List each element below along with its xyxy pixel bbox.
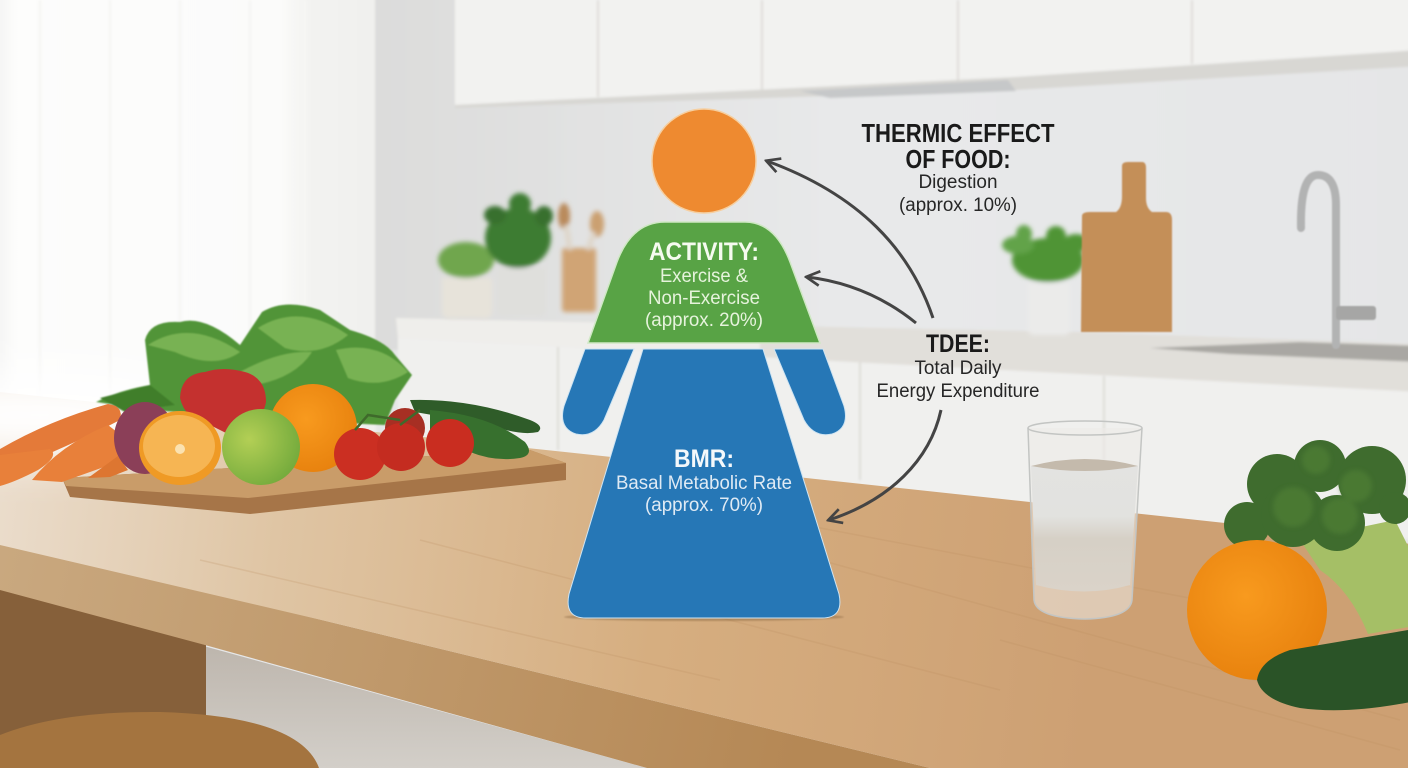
green apple: [222, 409, 300, 485]
lower cabinets: [398, 336, 1408, 540]
TDEE label: Energy Expenditure: [876, 381, 1040, 402]
vegetables on cutting board: [0, 304, 566, 514]
lower body: BMR segment: [562, 349, 846, 618]
cutting board on counter: [1081, 162, 1172, 332]
right potted plant: [1002, 225, 1089, 335]
wall below table: [0, 590, 647, 768]
faucet: [1301, 175, 1376, 345]
activity detail: [645, 266, 763, 331]
cucumber: [1257, 628, 1408, 710]
TDEE label: [876, 330, 1040, 402]
table leg: [0, 585, 206, 740]
red onion: [114, 402, 176, 474]
BMR detail: Basal Metabolic Rate: [616, 473, 792, 494]
stool: [0, 712, 319, 768]
activity label: ACTIVITY:: [649, 238, 759, 266]
broccoli, orange and cucumber: [1187, 440, 1408, 710]
head: thermic effect segment: [652, 109, 756, 213]
table surface: [0, 392, 1408, 768]
torso: activity segment: [588, 222, 820, 343]
whole orange: [269, 384, 357, 472]
arrow: TDEE to BMR: [829, 410, 941, 520]
TDEE label: TDEE:: [926, 330, 990, 358]
tomatoes: [334, 408, 474, 480]
counter top: [396, 318, 1408, 392]
thermic effect label: (approx. 10%): [899, 195, 1017, 216]
right arm: [774, 349, 846, 435]
table edge: [0, 540, 930, 768]
figure shadow: [564, 613, 844, 621]
broccoli stem: [1300, 520, 1408, 634]
wooden utensils: [558, 203, 604, 312]
sink: [1150, 342, 1408, 362]
activity detail: Non-Exercise: [648, 288, 760, 309]
cutting board: [62, 450, 566, 514]
cucumbers: [410, 400, 540, 459]
arrow: TDEE to head: [767, 161, 933, 318]
orange: [1187, 540, 1327, 680]
broccoli florets: [1224, 440, 1408, 551]
glass of water: [1028, 421, 1142, 619]
thermic effect label: [862, 118, 1055, 216]
table: [0, 373, 1408, 768]
BMR detail: (approx. 70%): [645, 495, 763, 516]
leafy greens: [96, 304, 412, 425]
upper cabinets: [455, 0, 1408, 108]
BMR detail: [616, 473, 792, 516]
orange half: [139, 411, 221, 485]
thermic effect label: THERMIC EFFECT: [862, 118, 1055, 148]
TDEE label: Total Daily: [914, 358, 1002, 379]
thermic effect label: OF FOOD:: [906, 144, 1010, 174]
activity detail: Exercise &: [660, 266, 748, 287]
carrots: [0, 404, 128, 486]
bell pepper: [180, 369, 266, 436]
activity detail: (approx. 20%): [645, 310, 763, 331]
arrow: TDEE to activity: [807, 277, 916, 323]
background plants and utensils: [438, 162, 1376, 345]
left arm: [562, 349, 634, 435]
left pots: [438, 193, 553, 318]
thermic effect label: Digestion: [918, 172, 998, 193]
BMR label: BMR:: [674, 445, 734, 473]
